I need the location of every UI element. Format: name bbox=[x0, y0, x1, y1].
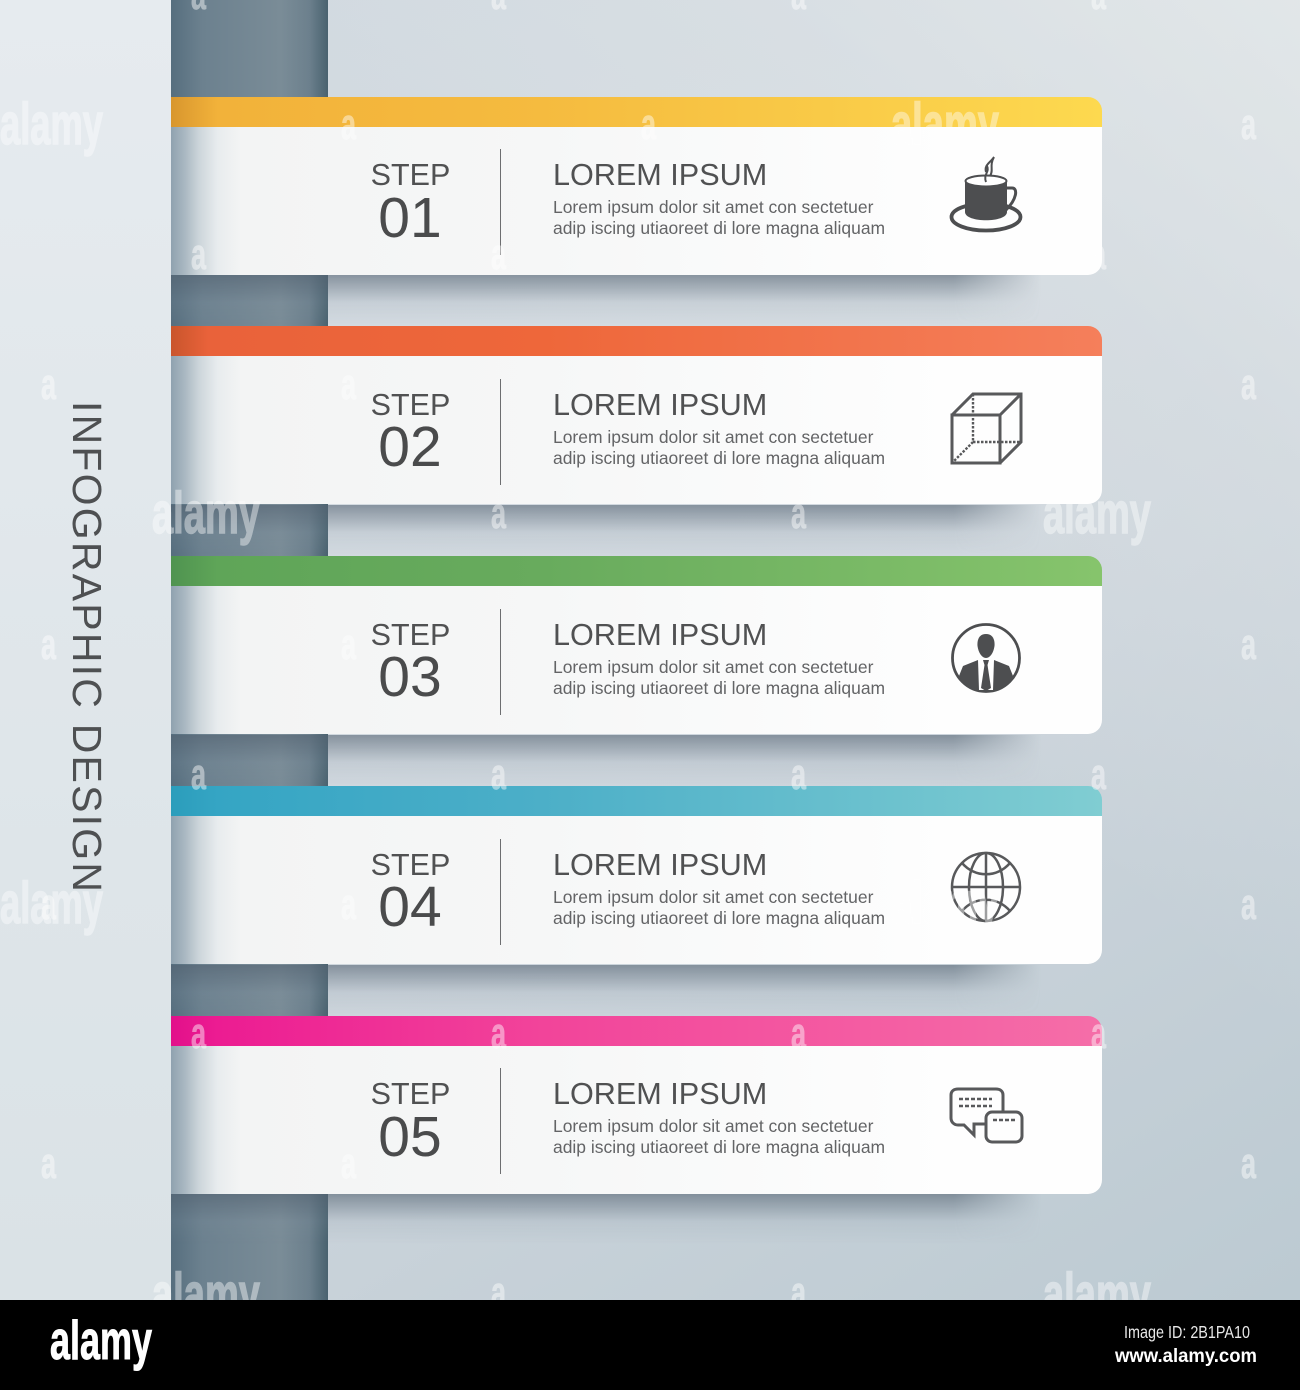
watermarks: a bbox=[191, 750, 206, 799]
step number: 05 bbox=[378, 1105, 442, 1169]
shadow: card 1 bbox=[176, 275, 1032, 312]
color bar bbox=[171, 1016, 1102, 1046]
panel: step 03 bbox=[171, 556, 1102, 734]
watermarks: a bbox=[341, 620, 356, 669]
body text: adip iscing utiaoreet di lore magna aliquam bbox=[553, 218, 885, 238]
watermarks: a bbox=[191, 1009, 206, 1058]
watermarks: a bbox=[1241, 1139, 1256, 1188]
shadow: card 5 bbox=[176, 1194, 1030, 1228]
watermarks: a bbox=[341, 100, 356, 149]
watermarks: a bbox=[191, 230, 206, 279]
step label: STEP bbox=[371, 1077, 450, 1111]
body text bbox=[553, 657, 885, 698]
body text: adip iscing utiaoreet di lore magna aliquam bbox=[553, 678, 885, 698]
card body bbox=[171, 586, 1102, 734]
watermarks: a bbox=[341, 360, 356, 409]
watermarks: alamy bbox=[0, 871, 103, 936]
panel: step 01 bbox=[171, 97, 1102, 275]
step number: 04 bbox=[378, 875, 442, 939]
watermarks: alamy bbox=[1043, 481, 1151, 546]
card body bbox=[171, 816, 1102, 964]
step label: STEP bbox=[371, 388, 450, 422]
step number: 03 bbox=[378, 645, 442, 709]
body text bbox=[553, 1116, 885, 1157]
shadow: card 3 bbox=[176, 735, 1031, 770]
watermarks: a bbox=[491, 230, 506, 279]
watermarks: alamy bbox=[152, 481, 260, 546]
watermarks: a bbox=[41, 880, 56, 929]
watermarks: alamy bbox=[891, 92, 999, 157]
body text: Lorem ipsum dolor sit amet con sectetuer bbox=[553, 657, 873, 677]
body text: Lorem ipsum dolor sit amet con sectetuer bbox=[553, 427, 873, 447]
watermarks: a bbox=[341, 880, 356, 929]
left panel bbox=[0, 0, 171, 1300]
watermarks: a bbox=[491, 489, 506, 538]
step number: 02 bbox=[378, 415, 442, 479]
step label: STEP bbox=[371, 618, 450, 652]
body text bbox=[553, 887, 885, 928]
watermarks: a bbox=[791, 750, 806, 799]
icon: chat bubbles bbox=[950, 1088, 1024, 1144]
watermarks: a bbox=[341, 1139, 356, 1188]
dark vertical strip bbox=[171, 0, 328, 1300]
body text: adip iscing utiaoreet di lore magna aliquam bbox=[553, 1137, 885, 1157]
background highlight top right bbox=[328, 0, 1300, 1300]
watermarks: alamy bbox=[0, 92, 103, 157]
shadow: card 4 bbox=[176, 965, 1030, 1000]
body text bbox=[553, 197, 885, 238]
color bar bbox=[171, 326, 1102, 356]
watermarks: a bbox=[641, 100, 656, 149]
shadow: card 2 bbox=[182, 505, 1032, 540]
watermarks: a bbox=[1241, 620, 1256, 669]
step label: STEP bbox=[371, 848, 450, 882]
panel: step 02 bbox=[171, 326, 1102, 504]
watermarks: a bbox=[491, 750, 506, 799]
watermarks: a bbox=[1091, 230, 1106, 279]
body text: Lorem ipsum dolor sit amet con sectetuer bbox=[553, 887, 873, 907]
watermarks: a bbox=[1091, 1009, 1106, 1058]
website: www.alamy.com bbox=[1114, 1345, 1257, 1367]
body text: adip iscing utiaoreet di lore magna aliquam bbox=[553, 448, 885, 468]
watermarks: a bbox=[41, 620, 56, 669]
footer bar bbox=[0, 1300, 1300, 1390]
heading: LOREM IPSUM bbox=[553, 158, 767, 192]
icon: coffee cup bbox=[950, 156, 1022, 232]
icon: globe bbox=[950, 852, 1022, 922]
watermarks: a bbox=[41, 1139, 56, 1188]
vertical title: INFOGRAPHIC DESIGN bbox=[64, 401, 110, 892]
heading: LOREM IPSUM bbox=[553, 1077, 767, 1111]
body text: Lorem ipsum dolor sit amet con sectetuer bbox=[553, 197, 873, 217]
watermarks: a bbox=[1241, 100, 1256, 149]
watermarks: a bbox=[491, 1009, 506, 1058]
heading: LOREM IPSUM bbox=[553, 618, 767, 652]
icon: cube bbox=[950, 392, 1022, 464]
watermarks: a bbox=[41, 360, 56, 409]
panel: step 05 bbox=[171, 1016, 1102, 1194]
card body bbox=[171, 356, 1102, 504]
watermarks: a bbox=[791, 489, 806, 538]
color bar bbox=[171, 556, 1102, 586]
watermarks: a bbox=[1241, 360, 1256, 409]
step label: STEP bbox=[371, 158, 450, 192]
heading: LOREM IPSUM bbox=[553, 848, 767, 882]
watermarks: alamy bbox=[891, 871, 999, 936]
watermarks: a bbox=[791, 1009, 806, 1058]
watermarks: a bbox=[1091, 750, 1106, 799]
watermarks: a bbox=[1241, 880, 1256, 929]
card body bbox=[171, 127, 1102, 275]
body text bbox=[553, 427, 885, 468]
panel: step 04 bbox=[171, 786, 1102, 964]
card body bbox=[171, 1046, 1102, 1194]
icon: businessman bbox=[951, 623, 1021, 693]
heading: LOREM IPSUM bbox=[553, 388, 767, 422]
color bar bbox=[171, 97, 1102, 127]
body text: adip iscing utiaoreet di lore magna aliquam bbox=[553, 908, 885, 928]
body text: Lorem ipsum dolor sit amet con sectetuer bbox=[553, 1116, 873, 1136]
color bar bbox=[171, 786, 1102, 816]
step number: 01 bbox=[378, 186, 442, 250]
